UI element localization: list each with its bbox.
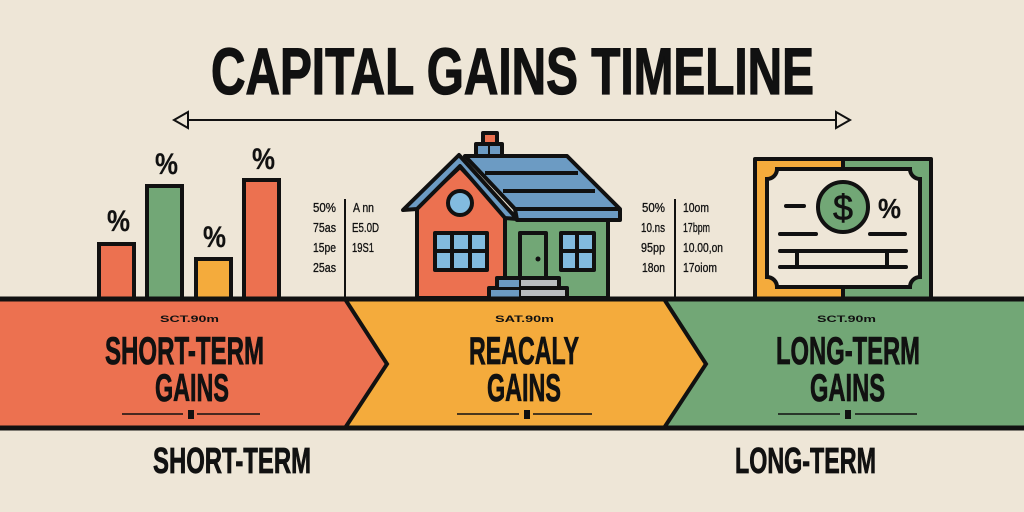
icon: certificate: $ <box>833 187 853 228</box>
text block: middle section label: SAT.90m <box>495 314 554 325</box>
panel: long-term band <box>0 299 1024 428</box>
bar chart: percent bars: % <box>203 221 226 254</box>
text block: middle rate table <box>641 199 723 298</box>
icon: certificate: % <box>878 193 901 224</box>
bar chart: percent bars: % <box>155 148 178 181</box>
band outlines <box>0 299 1024 428</box>
text block: middle section label: REACALY <box>469 330 579 373</box>
text block: short-term section label: SHORT-TERM <box>105 330 264 373</box>
text block: long-term section label: SCT.90m <box>817 314 876 325</box>
text block: middle rate table: 10.ns <box>641 220 665 235</box>
text block: left rate table: 19S1 <box>352 240 374 255</box>
icon: house <box>403 133 620 298</box>
text block: middle rate table: 17bpm <box>683 220 710 235</box>
text block: left rate table: 50% <box>313 200 336 215</box>
text block: short-term section label <box>105 314 264 419</box>
label: short-term: SHORT-TERM <box>153 440 311 481</box>
title: CAPITAL GAINS TIMELINE <box>211 34 814 108</box>
text block: middle section label <box>457 314 592 419</box>
text block: left rate table: E5.0D <box>352 220 379 235</box>
text block: middle rate table: 50% <box>642 200 665 215</box>
text block: long-term section label: LONG-TERM <box>776 330 920 373</box>
text block: left rate table: 15pe <box>313 240 336 255</box>
bar chart: percent bars: % <box>252 143 275 176</box>
label: long-term: LONG-TERM <box>735 440 876 481</box>
icon: certificate <box>755 159 931 299</box>
text block: left rate table: 25as <box>313 260 336 275</box>
text block: short-term section label: SCT.90m <box>160 314 219 325</box>
text block: left rate table <box>313 199 379 298</box>
bar chart: percent bars <box>99 143 279 299</box>
arrow: timeline double-headed <box>174 112 850 128</box>
text block: middle rate table: 17oiom <box>683 260 717 275</box>
text block: middle section label: GAINS <box>487 367 561 410</box>
text block: long-term section label: GAINS <box>810 367 885 410</box>
panel: middle band <box>340 299 706 428</box>
text block: short-term section label: GAINS <box>155 367 229 410</box>
text block: middle rate table: 10om <box>683 200 709 215</box>
text block: left rate table: A nn <box>353 200 374 215</box>
bar chart: percent bars: % <box>107 205 130 238</box>
text block: middle rate table: 10.00,on <box>683 240 723 255</box>
text block: left rate table: 75as <box>313 220 336 235</box>
panel: short-term band <box>0 299 387 428</box>
text block: long-term section label <box>776 314 920 419</box>
text block: middle rate table: 95pp <box>641 240 665 255</box>
text block: middle rate table: 18on <box>642 260 665 275</box>
